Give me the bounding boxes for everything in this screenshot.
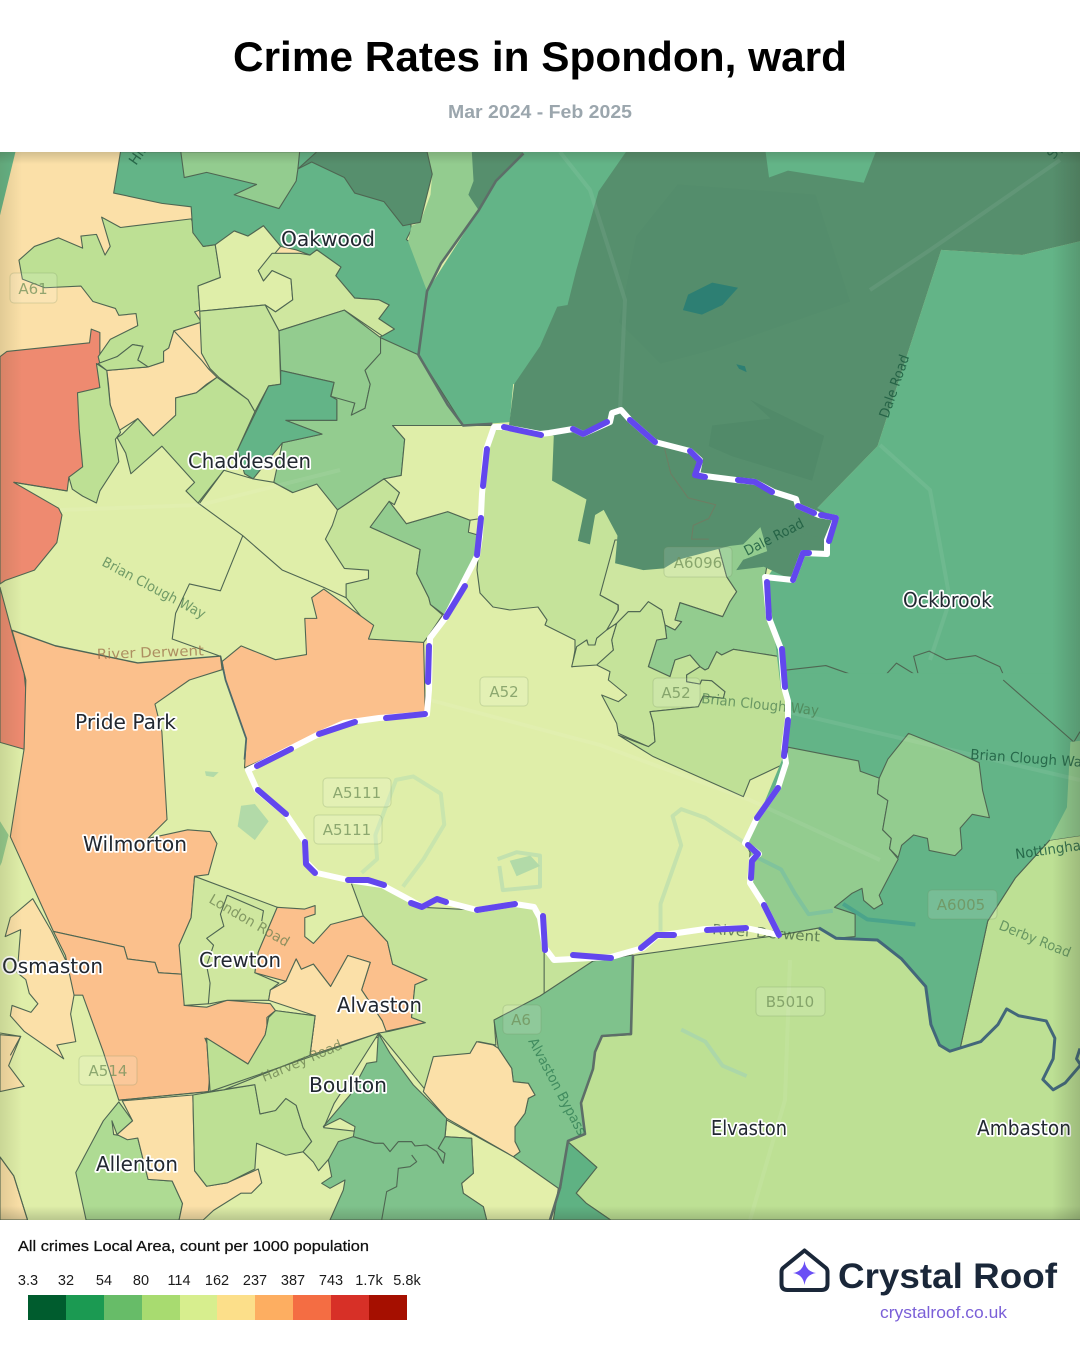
map panel: south-east wards xyxy=(533,673,1080,1220)
place name labels: Wilmorton xyxy=(83,832,187,856)
road shields: B5010 xyxy=(766,993,814,1011)
legend values: 3.3 xyxy=(18,1273,38,1289)
road shields: A6 xyxy=(511,1011,531,1029)
water: streams within the ward xyxy=(661,809,915,1076)
place name labels: Chaddesden xyxy=(188,449,311,473)
legend values xyxy=(18,1273,421,1289)
road and river labels: Harvey Road xyxy=(259,1037,345,1086)
map panel: Boulton and Alvaston Bypass wards xyxy=(322,955,633,1220)
place name labels xyxy=(2,227,1071,1176)
road and river labels: Sp xyxy=(1044,138,1068,162)
map edge vignette xyxy=(0,152,1080,1220)
place name labels: Ockbrook xyxy=(903,588,992,612)
legend title: All crimes Local Area, count per 1000 population xyxy=(18,1239,369,1255)
road shields xyxy=(10,273,997,1085)
wordmark: Crystal Roof xyxy=(838,1257,1057,1296)
place name labels: Elvaston xyxy=(711,1116,787,1140)
place name labels: Oakwood xyxy=(281,227,375,251)
road and river labels: Dale Road xyxy=(742,516,807,560)
road and river labels: River Derwent xyxy=(712,922,821,946)
road and river labels xyxy=(97,138,1080,1138)
place name labels: Osmaston xyxy=(2,954,103,978)
legend values: 32 xyxy=(58,1273,74,1289)
map panel: north-west neighbourhoods xyxy=(0,152,641,768)
title: Crime Rates in Spondon, ward xyxy=(233,33,847,80)
faint road network xyxy=(60,152,1080,1220)
map panel: north-east wards xyxy=(509,152,1080,690)
place name labels: Ambaston xyxy=(977,1116,1071,1140)
legend values: 162 xyxy=(205,1273,229,1289)
road shields: A6096 xyxy=(674,554,722,572)
road shields: A5111 xyxy=(323,821,371,839)
road and river labels: Alvaston Bypass xyxy=(524,1035,589,1138)
water: river loop and lakes xyxy=(205,771,540,890)
road shields: A5111 xyxy=(333,784,381,802)
road and river labels: Brian Clough Way xyxy=(701,691,820,719)
place name labels: Crewton xyxy=(199,948,281,972)
icon: house with star xyxy=(782,1250,828,1290)
road shields: A6005 xyxy=(937,896,985,914)
legend values: 114 xyxy=(167,1273,191,1289)
legend values: 743 xyxy=(319,1273,343,1289)
place name labels: Pride Park xyxy=(75,710,176,734)
legend values: 54 xyxy=(96,1273,112,1289)
road and river labels: River Derwent xyxy=(97,643,205,663)
Spondon ward boundary xyxy=(248,410,836,960)
legend values: 5.8k xyxy=(393,1273,421,1289)
road shields: A52 xyxy=(489,683,519,701)
road and river labels: Hill xyxy=(126,141,152,168)
map panel: Spondon eastern estates xyxy=(572,510,788,797)
legend xyxy=(18,1239,421,1320)
place name labels: Alvaston xyxy=(337,993,422,1017)
subtitle: date range: Mar 2024 - Feb 2025 xyxy=(448,102,632,122)
road shields: A61 xyxy=(18,280,48,298)
legend values: 1.7k xyxy=(355,1273,383,1289)
place name labels: Allenton xyxy=(96,1152,178,1176)
road shields: A514 xyxy=(89,1062,127,1080)
map panel: Spondon north-west sector xyxy=(477,427,620,667)
road and river labels: Dale Road xyxy=(877,353,913,420)
road and river labels: London Road xyxy=(206,892,292,950)
legend values: 237 xyxy=(243,1273,267,1289)
legend colour scale xyxy=(28,1295,407,1320)
website: crystalroof.co.uk xyxy=(880,1304,1008,1322)
legend values: 80 xyxy=(133,1273,149,1289)
road and river labels: Derby Road xyxy=(997,918,1073,961)
place name labels: Boulton xyxy=(309,1073,387,1097)
map panel: south-west wards xyxy=(0,630,544,1220)
road and river labels: Brian Clough Way xyxy=(99,554,208,623)
road shields: A52 xyxy=(661,684,691,702)
logo: Crystal Roof xyxy=(782,1250,1057,1322)
legend values: 387 xyxy=(281,1273,305,1289)
